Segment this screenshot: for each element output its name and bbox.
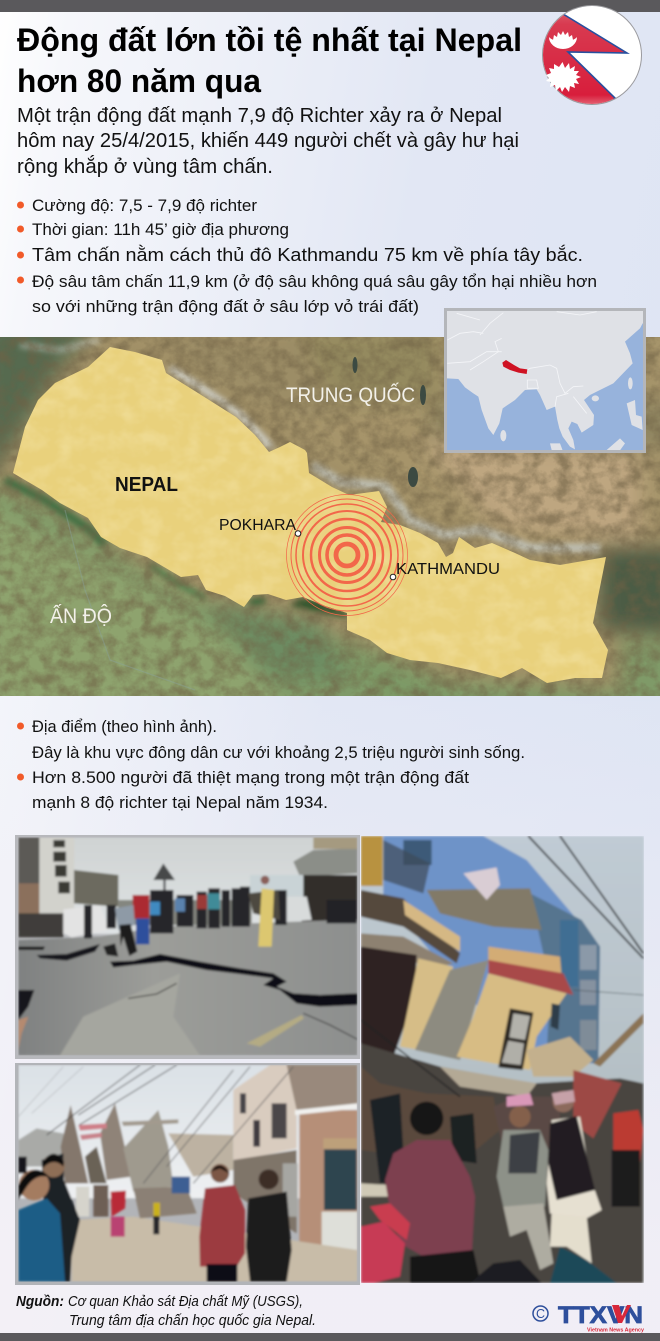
map labels: NEPAL [115,474,178,496]
logo: TTXVN [532,1302,645,1333]
top bar [0,0,660,12]
borders [447,312,597,413]
source note: Trung tâm địa chấn học quốc gia Nepal. [69,1312,316,1329]
photo: cracked road [15,835,360,1059]
intro text: hôm nay 25/4/2015, khiến 449 người chết và gây hư hại [17,129,519,152]
logo: TTXVN: TTXVN [558,1302,643,1329]
crowd [84,887,287,938]
bullet list: location: Đây là khu vực đông dân cư với khoảng 2,5 triệu người sinh sống. [32,743,525,762]
inset locator map [444,308,646,453]
logo: TTXVN: C [536,1307,545,1321]
map labels [50,383,500,628]
city dots [295,531,396,580]
map labels: POKHARA [219,517,297,534]
map labels: KATHMANDU [396,561,500,578]
sea [447,323,648,457]
moon [549,37,577,49]
title: hơn 80 năm qua [17,63,262,99]
bullet list: facts: Cường độ: 7,5 - 7,9 độ richter [32,196,257,215]
bullet list: facts: Tâm chấn nằm cách thủ đô Kathmandu 75 km về phía tây bắc. [32,244,583,265]
islands [500,319,643,457]
Nepal area [13,347,608,683]
bullet list: location: Hơn 8.500 người đã thiệt mạng trong một trận động đất [32,768,469,787]
sun [546,62,581,92]
bullet list: location: mạnh 8 độ richter tại Nepal năm 1934. [32,793,328,812]
title [17,22,522,99]
bullet list: facts: Thời gian: 11h 45’ giờ địa phương [32,220,289,239]
river [65,510,195,690]
source note [16,1293,316,1329]
photo: collapsed building [15,1063,360,1285]
bottom bar [0,1333,660,1341]
source note: Cơ quan Khảo sát Địa chất Mỹ (USGS), [68,1293,303,1310]
map: Nepal terrain [0,337,660,696]
title: Động đất lớn tồi tệ nhất tại Nepal [17,22,522,58]
bullet list: facts: Độ sâu tâm chấn 11,9 km (ở độ sâu không quá sâu gây tổn hại nhiều hơn [32,272,597,291]
source note: Nguồn: [16,1293,64,1310]
bullet list: location [17,717,525,812]
intro text [17,104,519,178]
intro text: rộng khắp ở vùng tâm chấn. [17,155,273,178]
intro text: Một trận động đất mạnh 7,9 độ Richter xảy ra ở Nepal [17,104,502,127]
bullet list: facts [17,196,597,316]
map labels: TRUNG QUỐC [286,383,415,407]
icon: Nepal flag [542,5,642,105]
bullet list: facts: so với những trận động đất ở sâu lớp vỏ trái đất) [32,297,419,316]
epicentre rings [286,494,408,616]
Nepal highlight [502,360,527,374]
photo: damaged houses and bystanders [361,836,644,1283]
lakes [408,467,418,487]
map labels: ẤN ĐỘ [50,605,112,628]
bullet list: location: Địa điểm (theo hình ảnh). [32,717,217,736]
